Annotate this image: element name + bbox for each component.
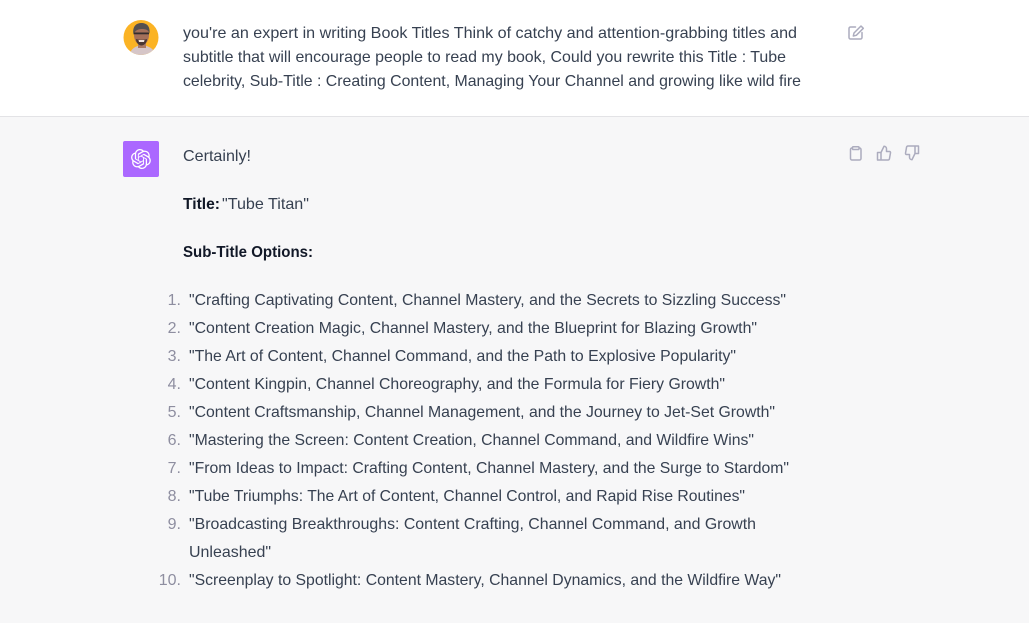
icon: user avatar [124,20,158,57]
user prompt text: celebrity, Sub-Title : Creating Content, Managing Your Channel and growing like wild fire [183,73,801,90]
numbered list of sub-titles: 9. [168,516,181,533]
numbered list of sub-titles: "Broadcasting Breakthroughs: Content Crafting, Channel Command, and Growth [189,516,756,533]
icon: edit [849,26,863,39]
numbered list of sub-titles: "From Ideas to Impact: Crafting Content, Channel Mastery, and the Surge to Stardom" [189,460,789,477]
sub-title heading: Sub-Title Options: [183,244,313,261]
numbered list of sub-titles: "Content Creation Magic, Channel Mastery, and the Blueprint for Blazing Growth" [189,320,757,337]
icon: copy clipboard [850,147,861,160]
numbered list of sub-titles: "Content Craftsmanship, Channel Management, and the Journey to Jet-Set Growth" [189,404,775,421]
user prompt text: you're an expert in writing Book Titles Think of catchy and attention-grabbing titles and [183,25,797,42]
numbered list of sub-titles: Unleashed" [189,544,271,561]
response intro: Certainly! [183,148,251,165]
numbered list of sub-titles: 1. [168,292,181,309]
numbered list of sub-titles: 8. [168,488,181,505]
numbered list of sub-titles: "Mastering the Screen: Content Creation, Channel Command, and Wildfire Wins" [189,432,754,449]
numbered list of sub-titles: "Screenplay to Spotlight: Content Mastery, Channel Dynamics, and the Wildfire Way" [189,572,781,589]
icon: assistant logo [123,141,159,177]
numbered list of sub-titles: 6. [168,432,181,449]
numbered list of sub-titles: "Content Kingpin, Channel Choreography, and the Formula for Fiery Growth" [189,376,725,393]
user prompt text [183,25,801,90]
numbered list of sub-titles: "Crafting Captivating Content, Channel Mastery, and the Secrets to Sizzling Success" [189,292,786,309]
numbered list of sub-titles: 5. [168,404,181,421]
icon: thumbs down [905,146,918,160]
numbered list of sub-titles: 4. [168,376,181,393]
title line: "Tube Titan" [222,196,309,213]
title line: Title: [183,196,220,213]
title line [183,196,309,213]
numbered list of sub-titles: 7. [168,460,181,477]
user prompt text: subtitle that will encourage people to read my book, Could you rewrite this Title : Tube [183,49,786,66]
numbered list of sub-titles: 3. [168,348,181,365]
numbered list of sub-titles: 2. [168,320,181,337]
numbered list of sub-titles [159,292,789,589]
icon: thumbs up [878,146,891,160]
numbered list of sub-titles: "Tube Triumphs: The Art of Content, Channel Control, and Rapid Rise Routines" [189,488,745,505]
numbered list of sub-titles: "The Art of Content, Channel Command, and the Path to Explosive Popularity" [189,348,736,365]
numbered list of sub-titles: 10. [159,572,181,589]
